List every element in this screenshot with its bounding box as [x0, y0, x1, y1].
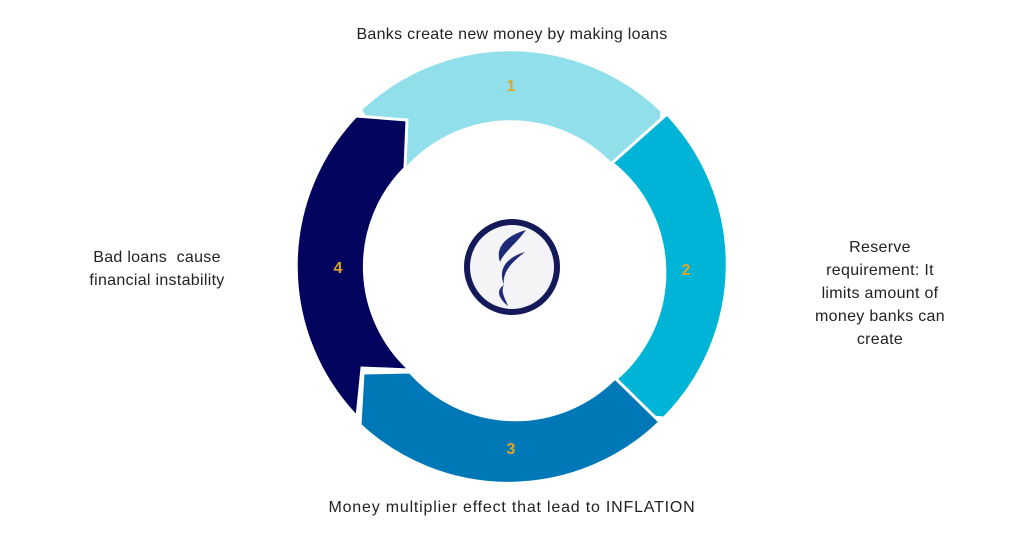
segment 2 [612, 114, 727, 418]
text: step 2 label [815, 239, 945, 348]
text: step 2 label: requirement: It [826, 262, 934, 279]
logo [467, 222, 557, 312]
text: step 2 label: Reserve [849, 239, 911, 256]
number 3: 3 [507, 441, 516, 458]
segment 3 [360, 372, 660, 483]
segment 4 [296, 116, 410, 417]
text: step 2 label: create [857, 331, 903, 348]
segment 1 [360, 50, 662, 170]
text: step 2 label: money banks can [815, 308, 945, 325]
text: step 4 label: Bad loans cause [93, 249, 221, 266]
text: step 2 label: limits amount of [822, 285, 938, 302]
text: step 4 label: financial instability [89, 272, 225, 289]
number 2: 2 [682, 262, 691, 279]
title: step 1 label: Banks create new money by making loans [356, 26, 668, 43]
number 1: 1 [507, 78, 516, 95]
text: step 4 label [89, 249, 225, 289]
text: step 3 label: Money multiplier effect that lead to INFLATION [328, 499, 696, 516]
number 4: 4 [334, 260, 343, 277]
